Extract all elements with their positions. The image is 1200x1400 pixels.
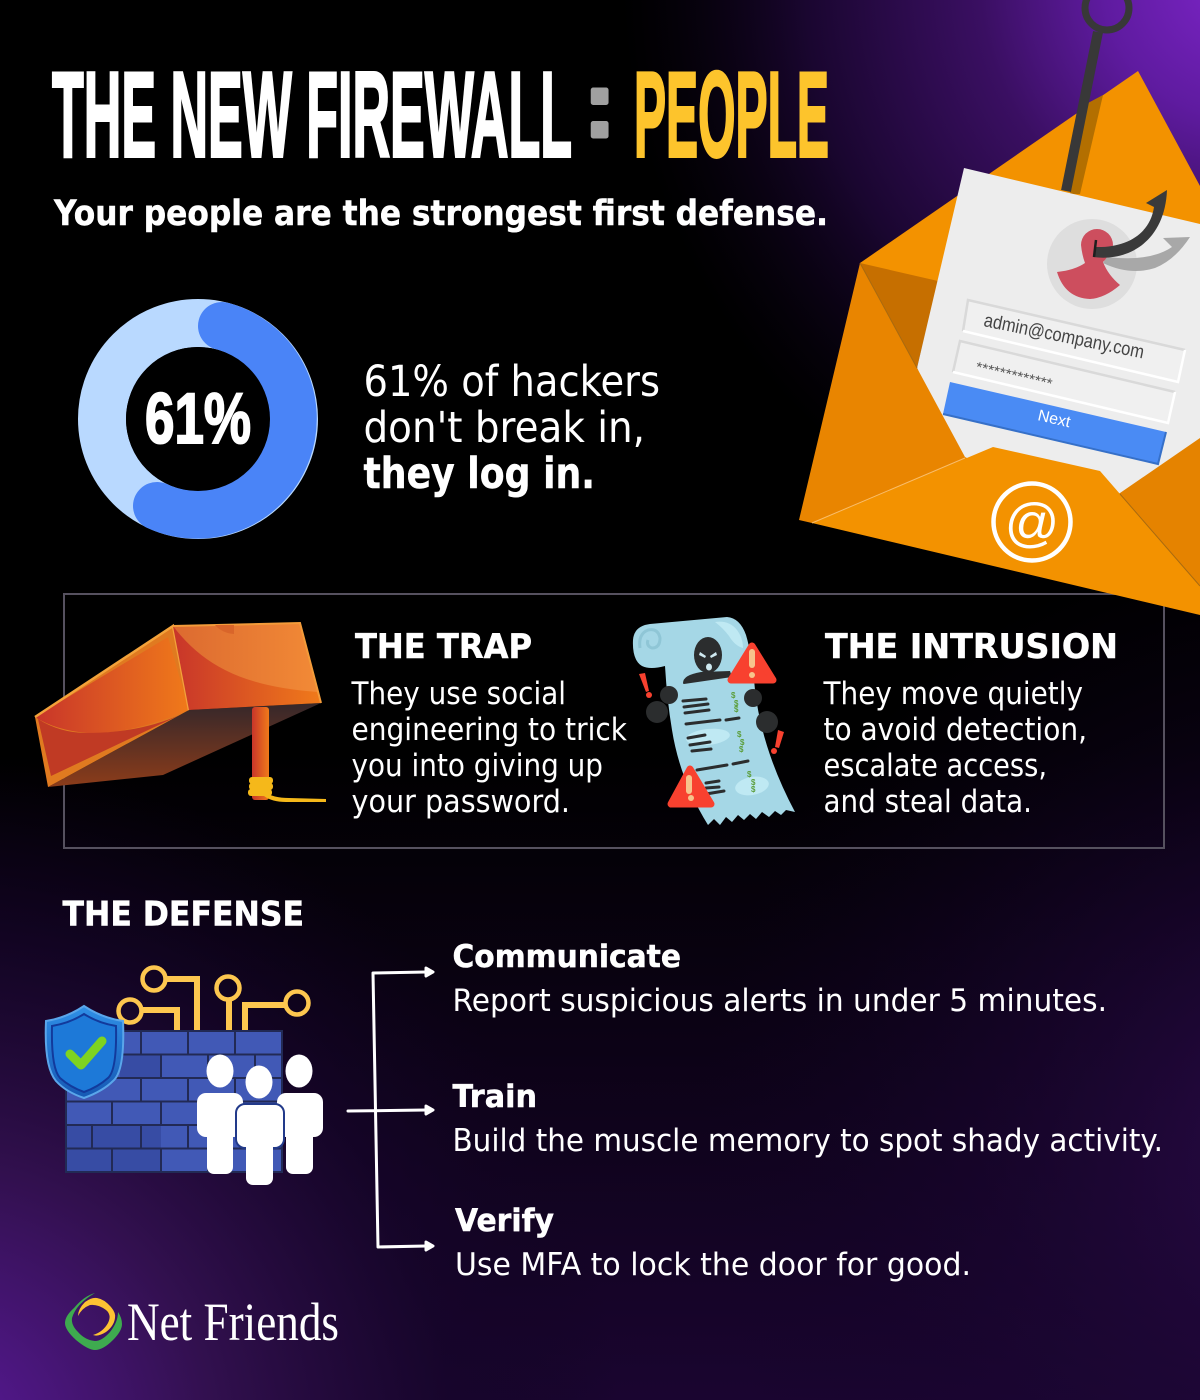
defense item: communicate: Report suspicious alerts in under 5 minutes. <box>452 983 1107 1019</box>
icon: at symbol <box>994 484 1070 560</box>
text: the trap: you into giving up <box>352 748 603 784</box>
dollar marks: $ <box>734 699 739 708</box>
text: the intrusion: to avoid detection, <box>824 712 1087 748</box>
brick wall <box>66 1031 282 1172</box>
statistic text: don't break in, <box>364 403 645 453</box>
heading: the trap: THE TRAP <box>355 627 532 667</box>
defense item: train: Build the muscle memory to spot shady activity. <box>452 1123 1163 1159</box>
defense item: train: Train <box>452 1079 537 1115</box>
subtitle: Your people are the strongest first defense. <box>53 194 828 234</box>
receipt lines <box>683 699 748 794</box>
password field: ************* <box>974 358 1055 392</box>
receipt scroll <box>633 617 795 825</box>
dollar marks: $ <box>740 738 745 747</box>
trap rope <box>248 777 326 802</box>
email field <box>963 300 1185 382</box>
envelope letter <box>917 168 1200 500</box>
people <box>197 1054 323 1185</box>
text: the intrusion: and steal data. <box>824 784 1032 820</box>
warning bottom <box>671 769 711 804</box>
envelope front flap <box>812 263 1200 615</box>
statistic text <box>364 357 660 499</box>
hook line <box>1066 0 1129 191</box>
warning top <box>731 646 773 680</box>
text: the trap <box>351 676 627 820</box>
trap right side <box>173 623 321 710</box>
text: the intrusion: They move quietly <box>823 676 1083 712</box>
text: the intrusion <box>823 676 1087 820</box>
defense item: communicate: Communicate <box>452 939 681 975</box>
logo: Net Friends: Net Friends <box>127 1292 339 1352</box>
statistic text: they log in. <box>364 449 595 499</box>
defense item: verify: Verify <box>455 1203 554 1239</box>
email field: admin@company.com <box>982 310 1146 363</box>
trap left side <box>35 626 189 787</box>
icon: firewall with shield and people <box>46 968 323 1185</box>
dollar marks: $ <box>747 770 752 779</box>
dollar marks: $ <box>737 730 742 739</box>
text: the trap: your password. <box>352 784 570 820</box>
heading: the defense: THE DEFENSE <box>62 894 304 934</box>
next button: Next <box>1036 407 1073 431</box>
dollar marks: $ <box>739 745 744 754</box>
shield with check <box>46 1006 123 1098</box>
trap underside <box>48 703 321 787</box>
next button <box>943 382 1166 464</box>
trap stick <box>252 707 269 800</box>
text: the trap: engineering to trick <box>352 712 627 748</box>
defense item: verify <box>455 1203 971 1283</box>
defense item: verify: Use MFA to lock the door for good. <box>455 1247 971 1283</box>
password field <box>953 341 1175 423</box>
defense item: communicate <box>452 939 1107 1019</box>
dollar marks: $ <box>731 691 736 700</box>
heading: the intrusion: THE INTRUSION <box>825 627 1118 667</box>
bracket arrows <box>348 968 433 1250</box>
logo: Net Friends <box>65 1292 339 1352</box>
dollar marks: $ <box>734 705 739 714</box>
statistic text: 61% of hackers <box>364 357 660 407</box>
text: the intrusion: escalate access, <box>824 748 1047 784</box>
defense item: train <box>452 1079 1163 1159</box>
donut value: 61% <box>145 380 251 459</box>
dollar marks: $ <box>751 778 756 787</box>
red exclamation marks <box>639 673 784 754</box>
icon: hacker with receipt <box>633 617 795 825</box>
title: : <box>584 55 615 156</box>
icon: at symbol: @ <box>1005 493 1059 553</box>
dollar marks <box>731 691 756 794</box>
donut chart: 61% <box>102 323 294 515</box>
panel: trap and intrusion <box>64 594 1164 848</box>
envelope right side <box>1105 438 1200 600</box>
envelope left side <box>799 263 975 523</box>
dollar marks: $ <box>751 785 756 794</box>
title <box>52 46 829 182</box>
hacker <box>646 637 778 733</box>
envelope back flap <box>860 71 1200 300</box>
icon: box trap <box>35 623 326 802</box>
text: the trap: They use social <box>351 676 566 712</box>
text: PEOPLE <box>634 46 829 182</box>
icon: phishing envelope <box>799 0 1200 615</box>
avatar <box>1047 190 1190 309</box>
circuit traces <box>118 968 308 1031</box>
